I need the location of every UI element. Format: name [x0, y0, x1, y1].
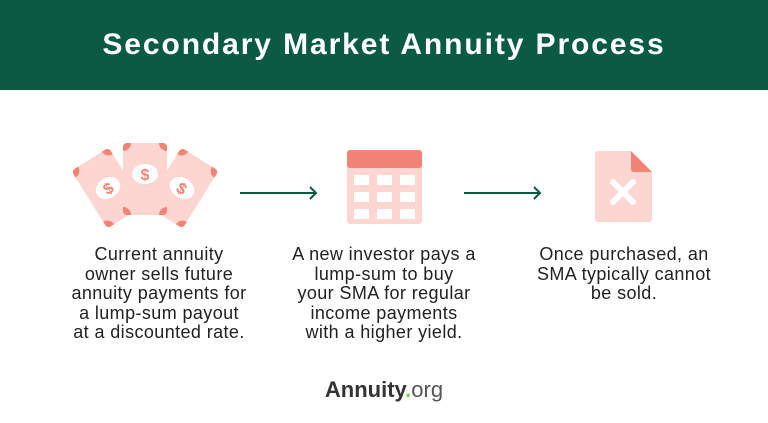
- text: step 3: SMA typically cannot: [537, 264, 711, 284]
- arrow 2: [464, 186, 542, 200]
- text: step 1: a lump-sum payout: [79, 303, 239, 323]
- text: step 3: [537, 244, 711, 303]
- text: step 1: owner sells future: [85, 264, 233, 284]
- title: [0, 0, 768, 90]
- text: step 3: Once purchased, an: [539, 244, 709, 264]
- text: step 1: [71, 244, 247, 342]
- title: Secondary Market Annuity Process: [102, 28, 666, 61]
- text: step 1: at a discounted rate.: [73, 322, 245, 342]
- text: step 2: lump-sum to buy: [314, 264, 454, 284]
- icon: document with x: [595, 151, 652, 222]
- icon: money bills: $: [173, 180, 190, 199]
- text: step 2: [292, 244, 476, 342]
- icon: calendar: [347, 150, 422, 224]
- text: step 2: your SMA for regular: [297, 283, 471, 303]
- text: step 3: be sold.: [591, 283, 657, 303]
- logo: Annuity.org: [325, 377, 443, 402]
- icon: money bills: $: [141, 167, 150, 184]
- text: step 2: with a higher yield.: [305, 322, 463, 342]
- arrow 1: [240, 186, 318, 200]
- icon: money bills: [72, 143, 218, 227]
- icon: money bills: $: [101, 180, 117, 199]
- text: step 2: income payments: [310, 303, 458, 323]
- text: step 1: annuity payments for: [71, 283, 247, 303]
- text: step 1: Current annuity: [94, 244, 224, 264]
- text: step 2: A new investor pays a: [292, 244, 476, 264]
